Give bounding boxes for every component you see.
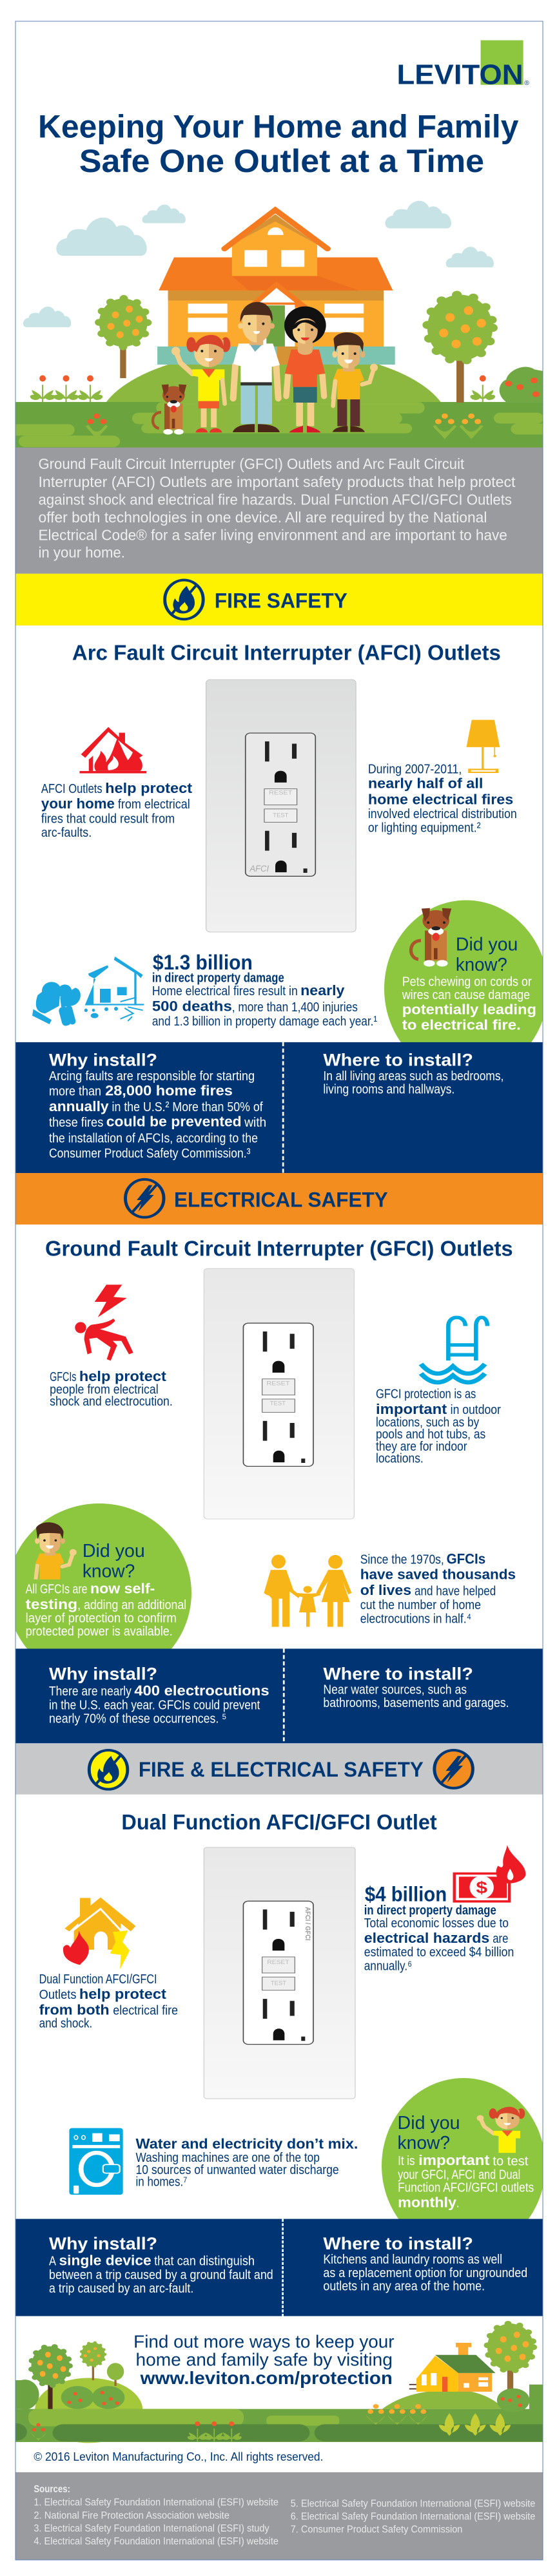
where to install — [323, 1051, 503, 1096]
dual function outlet: TEST — [271, 1981, 286, 1987]
copyright: © 2016 Leviton Manufacturing Co., Inc. All rights reserved. — [34, 2450, 323, 2464]
text: GFCI outdoor protection: in outdoor — [451, 1402, 501, 1417]
callout text: Did you — [456, 934, 518, 955]
panel: AFCI why and where to install — [15, 1042, 543, 1173]
why install: could be prevented — [106, 1114, 242, 1130]
section label: ELECTRICAL SAFETY — [174, 1188, 388, 1211]
text: GFCIs help protect — [50, 1368, 173, 1409]
intro background — [15, 448, 543, 574]
text: help protect from both: Outlets — [39, 1987, 76, 2002]
icon: girl — [476, 2107, 525, 2153]
callout text: , adding an additional — [77, 1597, 186, 1612]
call to action — [133, 2332, 395, 2388]
dual function section — [39, 1810, 525, 2099]
text: AFCI outlets help protect: fires that could result from — [41, 811, 175, 826]
section label: FIRE SAFETY — [215, 589, 347, 612]
stat text: are — [493, 1931, 508, 1946]
where to install — [323, 1665, 509, 1710]
callout text: to electrical fire. — [402, 1017, 521, 1033]
property damage stat — [32, 951, 377, 1028]
callout text — [402, 934, 536, 1033]
sources left column: 3. Electrical Safety Foundation International (ESFI) study — [34, 2523, 269, 2533]
dog — [153, 385, 186, 435]
stat text: and 1.3 billion in property damage each year.¹ — [152, 1013, 377, 1028]
why install: Arcing faults are responsible for starting — [49, 1068, 255, 1083]
text: GFCIs help protect: GFCIs — [50, 1369, 76, 1384]
text: help protect from both: help protect — [79, 1987, 166, 2002]
why install: 400 electrocutions — [134, 1683, 269, 1699]
where to install: Where to install? — [323, 1665, 473, 1684]
stat text — [360, 1551, 516, 1626]
panel: dual why and where to install — [15, 2219, 543, 2316]
sources left column — [34, 2496, 278, 2547]
text: GFCI outdoor protection — [376, 1386, 501, 1465]
call to action: home and family safe by visiting — [135, 2350, 393, 2370]
where to install: living rooms and hallways. — [323, 1082, 454, 1096]
intro text: in your home. — [39, 544, 125, 561]
text: GFCI outdoor protection: they are for indoor — [376, 1438, 467, 1453]
GFCI outlet — [204, 1268, 354, 1519]
GFCI section — [45, 1236, 513, 1519]
icon: fire badge — [89, 1750, 128, 1789]
stat text — [364, 1882, 514, 1973]
AFCI outlet: AFCI — [249, 864, 269, 874]
why install: Why install? — [49, 1665, 157, 1684]
fire and electrical safety band — [15, 1744, 543, 1795]
text: water and electricity — [135, 2136, 358, 2189]
why install: in the U.S.² More than 50% of — [112, 1099, 263, 1114]
stat text: and have helped — [415, 1583, 496, 1598]
lives saved stat — [264, 1551, 516, 1627]
callout text: potentially leading — [402, 1002, 536, 1018]
icon: electric shock — [75, 1284, 133, 1360]
callout text: . — [456, 2195, 459, 2210]
callout text: monthly — [398, 2195, 456, 2211]
why install: There are nearly — [49, 1684, 132, 1699]
fire safety band — [15, 574, 543, 625]
text: help protect from both: Dual Function AFCI/GFCI — [39, 1971, 157, 1986]
callout text: know? — [398, 2132, 450, 2153]
callout text: Did you — [83, 1540, 145, 1561]
text: AFCI outlets help protect: AFCI Outlets — [41, 781, 103, 796]
logo wordmark: LEVITON — [396, 59, 523, 90]
call to action: www.leviton.com/protection — [140, 2368, 393, 2388]
text: GFCI outdoor protection: important — [376, 1402, 447, 1417]
green circle — [15, 1503, 191, 1649]
why install: Why install? — [49, 2235, 157, 2253]
stat text: electrocutions in half.⁴ — [360, 1611, 471, 1626]
text: water and electricity: Water and electricity don’t mix. — [135, 2136, 358, 2152]
GFCI outlet: TEST — [270, 1400, 286, 1407]
intro text — [39, 455, 516, 561]
panel: GFCI why and where to install — [15, 1648, 543, 1743]
stat text: 500 deaths — [152, 998, 232, 1015]
icon: house on fire — [79, 727, 146, 774]
icon: electric badge — [435, 1750, 473, 1788]
text: GFCI outdoor protection: GFCI protection is as — [376, 1386, 476, 1401]
logo green square — [481, 40, 523, 85]
icon: washing machine — [69, 2128, 123, 2195]
text: GFCIs help protect: help protect — [79, 1368, 166, 1384]
text: AFCI outlets help protect: your home — [41, 796, 115, 812]
why install: these fires — [49, 1114, 103, 1130]
why install — [49, 1051, 266, 1160]
text: help protect from both: and shock. — [39, 2016, 92, 2030]
text: half of fires: nearly half of all — [368, 776, 483, 792]
stat text: nearly — [300, 983, 345, 999]
icon: boy — [35, 1522, 77, 1579]
sources right column — [291, 2497, 535, 2535]
why install: between a trip caused by a ground fault and — [49, 2267, 273, 2282]
AFCI section — [41, 640, 517, 932]
text: water and electricity: 10 sources of unwanted water discharge — [135, 2162, 339, 2177]
did you know: self-testing — [15, 1503, 191, 1649]
text: help protect from both: from both — [39, 2002, 110, 2018]
stat text: Since the 1970s, — [360, 1552, 444, 1567]
callout text: to test — [493, 2153, 529, 2168]
callout text: testing — [26, 1596, 77, 1612]
where to install: Near water sources, such as — [323, 1682, 467, 1697]
dual function outlet: AFCI / GFCI — [304, 1907, 311, 1940]
text: half of fires — [368, 761, 517, 835]
why install: a trip caused by an arc-fault. — [49, 2280, 193, 2295]
text: AFCI outlets help protect: from electrical — [118, 796, 190, 811]
AFCI outlet — [206, 680, 356, 932]
callout text: It is — [398, 2153, 415, 2168]
callout text: now self- — [90, 1581, 155, 1597]
why install: annually — [49, 1098, 109, 1114]
stat text: annually.⁶ — [364, 1958, 412, 1973]
AFCI outlet: TEST — [273, 812, 288, 819]
electrical safety band — [15, 1173, 543, 1225]
GFCI outlet: RESET — [266, 1380, 290, 1387]
text: GFCI outdoor protection: locations. — [376, 1451, 424, 1465]
sources left column: 1. Electrical Safety Foundation International (ESFI) website — [34, 2496, 278, 2508]
why install — [49, 2235, 273, 2295]
text: AFCI outlets help protect — [41, 780, 193, 840]
where to install: Where to install? — [323, 2235, 473, 2253]
stat text: $4 billion — [365, 1882, 447, 1905]
text: GFCIs help protect: people from electrical — [50, 1382, 159, 1397]
icon: dog — [411, 908, 451, 967]
family — [153, 302, 378, 435]
stat text — [152, 951, 377, 1028]
text: GFCI outdoor protection: pools and hot tubs, as — [376, 1426, 485, 1442]
panel: sources — [15, 2472, 543, 2561]
callout text: layer of protection to confirm — [26, 1610, 177, 1625]
title — [38, 108, 518, 179]
why install: the installation of AFCIs, according to the — [49, 1131, 258, 1145]
hero illustration: house and family — [7, 201, 550, 502]
icon: lamp — [466, 720, 500, 773]
why install — [49, 1665, 269, 1726]
text: help protect from both — [39, 1971, 178, 2030]
heading: Dual Function AFCI/GFCI Outlet — [121, 1810, 437, 1834]
stat text: of lives — [360, 1582, 411, 1598]
sources left column: 2. National Fire Protection Association website — [34, 2510, 230, 2521]
girl — [171, 335, 230, 432]
sources heading: Sources: — [34, 2483, 70, 2495]
where to install: outlets in any area of the home. — [323, 2278, 485, 2293]
why install: Why install? — [49, 1051, 157, 1070]
text: GFCI outdoor protection: locations, such as by — [376, 1415, 480, 1429]
icon: house with fire and bolt — [63, 1898, 135, 1969]
stat text: GFCIs — [447, 1551, 485, 1567]
icon: family — [264, 1554, 351, 1627]
AFCI outlet: RESET — [269, 790, 292, 796]
green circle — [384, 901, 543, 1042]
sources right column: 7. Consumer Product Safety Commission — [291, 2523, 462, 2535]
woman — [284, 307, 326, 432]
stat text: cut the number of home — [360, 1597, 481, 1612]
callout text — [26, 1540, 186, 1638]
callout text — [398, 2112, 534, 2211]
icon: no electricity — [126, 1179, 164, 1217]
did you know: test monthly — [382, 2078, 543, 2219]
sources left column: 4. Electrical Safety Foundation International (ESFI) website — [34, 2535, 278, 2547]
icon: burning money: $ — [476, 1879, 487, 1897]
section label: FIRE & ELECTRICAL SAFETY — [139, 1758, 424, 1781]
why install: that can distinguish — [154, 2253, 255, 2268]
why install: in the U.S. each year. GFCIs could prevent — [49, 1697, 260, 1712]
text: AFCI outlets help protect: arc-faults. — [41, 825, 92, 840]
text: water and electricity: Washing machines are one of the top — [135, 2150, 320, 2164]
stat text: have saved thousands — [360, 1567, 516, 1583]
man — [233, 302, 280, 432]
text: water and electricity: in homes.⁷ — [135, 2174, 187, 2189]
why install: more than — [49, 1083, 101, 1098]
why install: nearly 70% of these occurrences. ⁵ — [49, 1711, 227, 1726]
callout text: know? — [456, 954, 507, 975]
icon: burning money — [454, 1845, 525, 1902]
callout text: know? — [83, 1560, 135, 1581]
text: half of fires: home electrical fires — [368, 792, 513, 808]
callout text: important — [418, 2153, 490, 2168]
callout text: All GFCIs are — [26, 1581, 88, 1596]
text: help protect from both: electrical fire — [113, 2003, 178, 2018]
clouds and scenery — [7, 201, 550, 502]
why install: A — [49, 2253, 57, 2268]
green circle — [382, 2078, 543, 2219]
did you know: pets — [384, 901, 543, 1042]
stat text: $1.3 billion — [153, 951, 253, 974]
text: half of fires: or lighting equipment.² — [368, 820, 481, 835]
why install: 28,000 home fires — [105, 1083, 233, 1099]
house — [157, 210, 395, 365]
Leviton logo — [396, 40, 529, 90]
where to install: Where to install? — [323, 1051, 473, 1070]
stat text: , more than 1,400 injuries — [232, 999, 358, 1015]
intro panel — [15, 448, 543, 574]
text: AFCI outlets help protect: help protect — [105, 780, 193, 796]
callout text: protected power is available. — [26, 1623, 173, 1638]
call to action: Find out more ways to keep your — [133, 2332, 395, 2352]
callout text: Did you — [398, 2112, 460, 2133]
footer landscape illustration — [4, 2323, 557, 2443]
title: Safe One Outlet at a Time — [79, 143, 484, 179]
washer block — [69, 2128, 358, 2195]
boy — [332, 332, 378, 432]
Leviton logo: ® — [524, 80, 529, 87]
text: GFCIs help protect: shock and electrocution. — [50, 1393, 173, 1409]
why install: Consumer Product Safety Commission.³ — [49, 1145, 251, 1160]
stat text: in direct property damage — [152, 970, 284, 985]
icon: pool — [421, 1317, 487, 1382]
why install: with — [244, 1114, 266, 1130]
why install: single device — [59, 2253, 151, 2269]
icon: damaged house — [32, 957, 144, 1027]
dual function outlet: RESET — [267, 1960, 289, 1966]
dual function outlet — [204, 1847, 355, 2099]
text: half of fires: During 2007-2011, — [368, 761, 462, 776]
stat text: electrical hazards — [364, 1930, 489, 1946]
stat text: Home electrical fires result in — [152, 983, 298, 998]
icon: no fire — [165, 580, 203, 619]
where to install — [323, 2235, 527, 2293]
